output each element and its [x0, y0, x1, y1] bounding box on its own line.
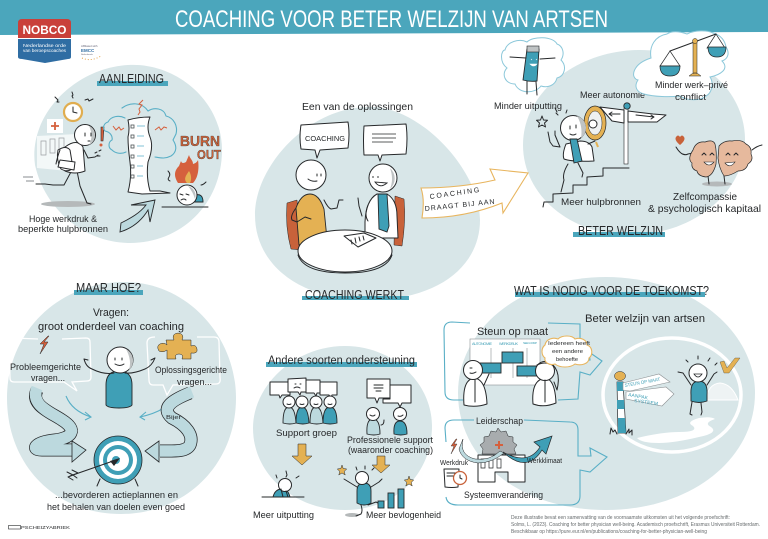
- speech bubble: probleemgericht: vragen...: [31, 373, 65, 384]
- icon: gear: [480, 428, 517, 454]
- speech bubble: probleemgericht: Probleemgerichte: [10, 362, 81, 373]
- text: meer hulpbronnen: Meer hulpbronnen: [561, 197, 641, 208]
- section: beter welzijn: [494, 31, 762, 238]
- text: beter welzijn van artsen: Beter welzijn van artsen: [585, 313, 705, 325]
- whiteboard: AUTONOMIE: [472, 342, 492, 346]
- text: professionele support: (waaronder coaching): [348, 445, 433, 456]
- icon: golden mirror: [584, 106, 606, 147]
- speech bubble: oplossingsgericht: vragen...: [177, 377, 212, 388]
- signpost with signs: STEUN OP MAAT: [624, 377, 661, 389]
- panel blob: maar hoe: [7, 282, 236, 514]
- signpost with signs: [610, 372, 674, 435]
- section: toekomst: [440, 283, 741, 505]
- whiteboard: WERKDRUK: [499, 342, 518, 346]
- logo: NOBCO: NOBCO: [22, 23, 66, 37]
- icon: hospital building: [37, 119, 78, 172]
- heading: maar hoe: MAAR HOE?: [76, 280, 141, 295]
- icon: exhausted person with flame: [162, 155, 208, 207]
- panel blob: andere soorten ondersteuning: [253, 346, 432, 510]
- logo: NOBCO: van beroepscoaches: [23, 48, 67, 53]
- credit text: [511, 515, 760, 535]
- figure: running doctor: [23, 124, 98, 207]
- logo: EMCC affiliation: EMCC: [81, 48, 95, 53]
- text: werkklimaat: Werkklimaat: [527, 458, 562, 465]
- icon: clock: [55, 92, 93, 121]
- signpost with signs: AANPAK: [628, 392, 649, 402]
- figures: professional support: [366, 408, 407, 435]
- arrow: coaching draagt bij aan: COACHING: [429, 187, 480, 201]
- heading: wat is nodig voor de toekomst: WAT IS NODIG VOOR DE TOEKOMST?: [514, 283, 709, 298]
- text: werkdruk: Werkdruk: [440, 460, 468, 467]
- text: zelfcompassie: [648, 191, 761, 215]
- header band with title: [0, 0, 768, 35]
- text: burn out: [180, 133, 221, 162]
- section: aanleiding: [18, 71, 221, 235]
- speech bubble: coaching: COACHING: [305, 136, 345, 143]
- text: bevorderen actieplannen: ...bevorderen actieplannen en: [55, 490, 178, 501]
- text: vragen: Vragen:: [93, 307, 129, 319]
- icon: long to-do list: [128, 117, 170, 194]
- text: zelfcompassie: Zelfcompassie: [673, 191, 737, 203]
- arrow: pointing to burn-out: [120, 200, 155, 232]
- text: hoge werkdruk: Hoge werkdruk &: [29, 214, 98, 225]
- white circle scene: [603, 338, 741, 452]
- icon: target with arrow: [67, 436, 142, 486]
- text: meer bevlogenheid: Meer bevlogenheid: [366, 510, 441, 521]
- text: een van de oplossingen: Een van de oplossingen: [302, 101, 413, 113]
- arrow: gold down left: [292, 444, 312, 465]
- text: systeemverandering: Systeemverandering: [464, 490, 543, 501]
- text: steun op maat: Steun op maat: [477, 326, 548, 338]
- icon: checkmark: [720, 358, 740, 373]
- text: bevorderen actieplannen: [47, 490, 185, 513]
- heading: andere soorten ondersteuning: Andere soorten ondersteuning: [268, 355, 415, 367]
- cloud with scale: Minder werk–privé: [655, 80, 728, 91]
- winding path: [637, 417, 715, 443]
- panel blob: beter welzijn: [523, 50, 745, 235]
- credit text: Beschikbaar op https://pure.eur.nl/en/publications/coaching-for-better-physician-well-being: [511, 529, 707, 535]
- text: burn out: BURN: [180, 133, 220, 150]
- logo: NOBCO: Nederlandse orde: [23, 43, 67, 48]
- speech bubbles: support group: [270, 378, 337, 398]
- text: zelfcompassie: & psychologisch kapitaal: [648, 203, 761, 215]
- text: vragen: [38, 307, 184, 333]
- sun on horizon: [706, 383, 738, 400]
- text: hoge werkdruk: beperkte hulpbronnen: [18, 224, 108, 235]
- text: hoge werkdruk: [18, 214, 108, 235]
- speech bubbles: professional support: [367, 379, 411, 407]
- icon: puzzle piece: [158, 333, 197, 359]
- icon: building: [478, 455, 525, 482]
- logo: EMCC affiliation: Netherlands: [81, 53, 94, 56]
- heading: aanleiding: AANLEIDING: [99, 71, 164, 86]
- icon: lightning: [40, 336, 49, 354]
- icon: lightning small: [451, 439, 457, 454]
- text: professionele support: [347, 435, 433, 456]
- text: meer autonomie: Meer autonomie: [580, 90, 645, 101]
- figure: coach in chair: [286, 160, 343, 250]
- text: burn out: OUT: [197, 147, 221, 162]
- outline: steun op maat with arrow: [444, 322, 602, 400]
- logo: psycheisfabriek: PSCHEIZYABRIEK: [21, 525, 70, 530]
- arrow: culture change swoosh: [459, 436, 552, 463]
- section: andere soorten ondersteuning: [253, 355, 441, 521]
- text: bevorderen actieplannen: het behalen van doelen even goed: [47, 502, 185, 513]
- text: vragen: groot onderdeel van coaching: [38, 321, 184, 333]
- figures: two doctors: [464, 360, 558, 406]
- arrows: light blue: [66, 395, 176, 420]
- logo: EMCC affiliation: Affiliated with: [81, 44, 98, 48]
- icon: signpost: [600, 103, 666, 164]
- figure: exhausted person at desk: [262, 471, 304, 497]
- icon: exclamation mark and sparks: [95, 127, 104, 156]
- cloud: iedereen heeft een andere behoefte: Iedereen heeft: [548, 341, 591, 347]
- wavy arrow: right: [145, 392, 192, 462]
- speech bubble: coaching: [300, 122, 349, 158]
- text: small label: Bijer: [166, 415, 181, 421]
- cloud: iedereen heeft een andere behoefte: een andere: [552, 349, 583, 355]
- icon: paper and clock: [444, 469, 466, 488]
- arrow: coaching draagt bij aan: DRAAGT BIJ AAN: [424, 199, 495, 213]
- figure: energetic person with chart: [337, 465, 414, 517]
- icon: cross on building: [495, 441, 503, 449]
- speech bubble: probleemgericht: [9, 338, 91, 391]
- cloud with scale: conflict: [675, 92, 706, 103]
- whiteboard: [470, 339, 540, 385]
- speech bubble: oplossingsgericht: Oplossingsgerichte: [155, 365, 227, 376]
- wavy arrow: left: [36, 388, 86, 462]
- whiteboard: SELF-COMP: [523, 341, 537, 345]
- header band with title: COACHING VOOR BETER WELZIJN VAN ARTSEN: [175, 6, 608, 33]
- cloud: iedereen heeft een andere behoefte: behoefte: [556, 357, 578, 363]
- text: meer uitputting: Meer uitputting: [253, 510, 314, 521]
- icon: stairs: [543, 168, 629, 207]
- panel blob: toekomst: [458, 277, 755, 510]
- table with paper: [298, 230, 392, 273]
- speech bubble: doctor: [364, 124, 407, 161]
- cloud: stress thoughts: [104, 104, 177, 158]
- credit text: Deze illustratie bevat een samenvatting van de voornaamste uitkomsten uit het volgende proefschrift:: [511, 515, 730, 521]
- heading: coaching werkt: COACHING WERKT: [305, 287, 404, 302]
- section: een van de oplossingen: [286, 101, 528, 302]
- figure: person with open arms: [84, 347, 155, 408]
- logo: EMCC affiliation: [81, 44, 101, 60]
- cloud with battery: [502, 38, 564, 95]
- cloud with scale: [634, 31, 728, 103]
- arrow: gold down right: [372, 456, 390, 473]
- figure: doctor on stairs: [548, 116, 595, 192]
- text: leiderschap: Leiderschap: [476, 416, 523, 427]
- arrow: coaching draagt bij aan: [421, 169, 528, 218]
- text: support groep: Support groep: [276, 428, 337, 439]
- icon: stress zigzags: [113, 100, 167, 130]
- speech bubble: oplossingsgericht: [147, 337, 227, 395]
- section: maar hoe: [9, 280, 227, 513]
- icon: happy brains: [676, 140, 762, 186]
- figures: support group: [283, 396, 337, 424]
- text: minder uitputting: Minder uitputting: [494, 101, 562, 112]
- text: professionele support: Professionele support: [347, 435, 433, 446]
- figure: cheering doctor: [678, 356, 717, 415]
- figure: doctor in chair: [358, 164, 405, 246]
- icon: heart: [676, 136, 684, 145]
- panel blob: aanleiding: [34, 65, 222, 243]
- cloud: iedereen heeft een andere behoefte: [542, 336, 592, 367]
- signpost with signs: SYSTEEM: [634, 398, 658, 407]
- heading: beter welzijn: BETER WELZIJN: [578, 223, 663, 238]
- icon: star and sparks: [536, 108, 567, 127]
- logo: psycheisfabriek: [8, 525, 70, 530]
- panel blob: een van de oplossingen: [255, 107, 480, 300]
- outline: leiderschap with arrow: [445, 420, 607, 505]
- logo: NOBCO: [18, 19, 71, 63]
